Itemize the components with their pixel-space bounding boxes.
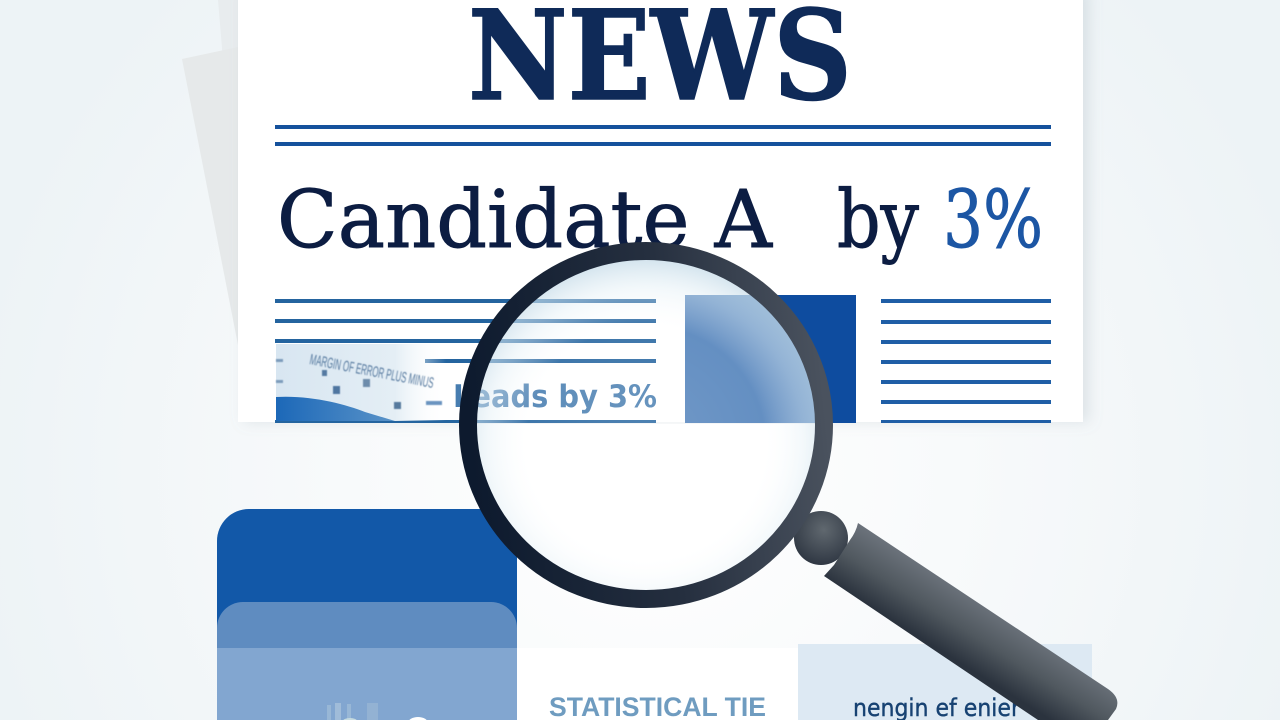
- lens ring: [468, 251, 824, 599]
- handle collar: [794, 511, 848, 565]
- masthead double rule: [275, 125, 1051, 146]
- smudged fine print: [276, 344, 446, 421]
- headline: by: [837, 173, 919, 266]
- handle: [824, 523, 1117, 720]
- card light layer: [217, 648, 517, 720]
- icon: magnifying glass: [460, 251, 1117, 720]
- card mid layer: [217, 602, 517, 648]
- panel: margin of error box: [798, 644, 1092, 720]
- headline: Candidate A: [277, 173, 773, 266]
- back paper sheets: [182, 0, 238, 345]
- headline: 3%: [943, 173, 1043, 266]
- panel: bottom white sheet: [517, 648, 802, 720]
- lens glass: [468, 251, 824, 599]
- smudged fine print: MARGIN OF ERROR PLUS MINUS: [308, 351, 435, 392]
- panel: blue card: [217, 509, 517, 720]
- lens contents: [496, 295, 815, 529]
- card icon fragment: [275, 703, 428, 720]
- left column text lines: [275, 299, 656, 423]
- infographic scene: [182, 0, 1118, 720]
- fine print caption: Leads by 3%: [453, 379, 657, 415]
- blue photo block: [685, 295, 856, 423]
- headline: [277, 173, 1043, 266]
- panel: newspaper: [238, 0, 1083, 423]
- right column text lines: [881, 299, 1051, 423]
